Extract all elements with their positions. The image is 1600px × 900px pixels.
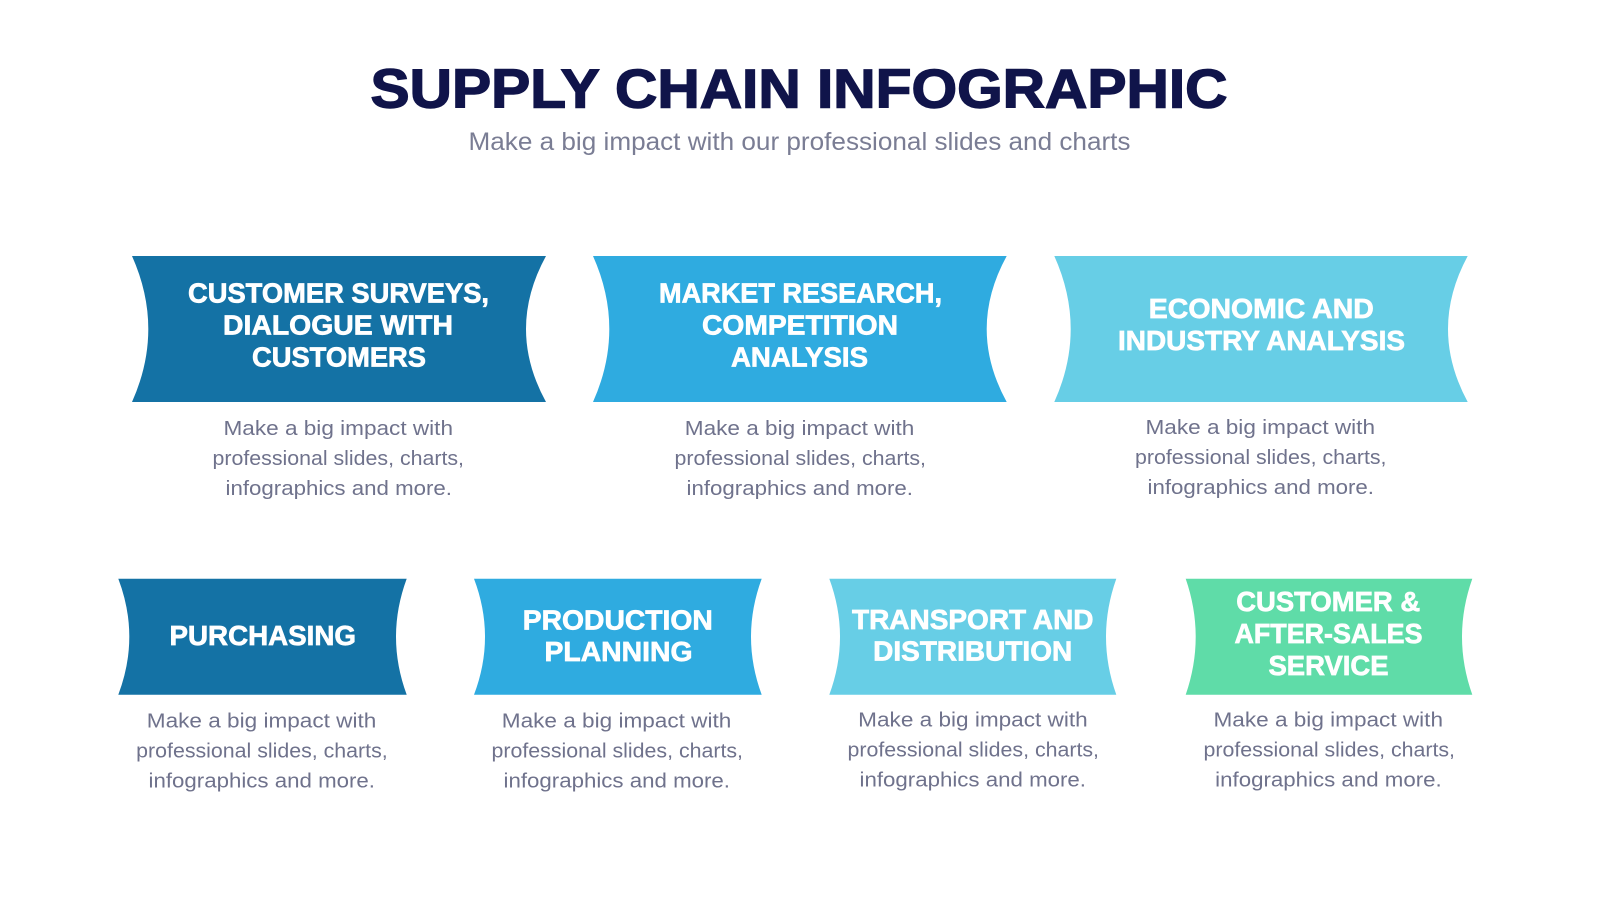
- description: market research: infographics and more.: [686, 478, 913, 500]
- description: production planning: Make a big impact with: [502, 711, 731, 733]
- banner: after-sales service: [1186, 579, 1472, 695]
- panel: market research: [593, 256, 1007, 500]
- panel: customer surveys: [132, 256, 546, 500]
- description: purchasing: [136, 711, 388, 793]
- heading: customer surveys: DIALOGUE WITH: [223, 310, 453, 340]
- banner: production planning: [474, 579, 762, 695]
- description: economic analysis: infographics and more.: [1148, 477, 1374, 499]
- description: market research: [674, 418, 926, 500]
- description: production planning: professional slides, charts,: [492, 741, 743, 763]
- description: customer surveys: [212, 418, 464, 500]
- description: customer surveys: Make a big impact with: [224, 418, 453, 440]
- heading: market research: [659, 278, 942, 372]
- panel: purchasing: [118, 579, 407, 793]
- heading: after-sales service: AFTER-SALES: [1234, 618, 1422, 649]
- banner: economic analysis: [1054, 256, 1468, 402]
- description: transport and distribution: Make a big impact with: [858, 710, 1088, 732]
- description: after-sales service: [1204, 710, 1455, 792]
- description: production planning: [492, 711, 743, 793]
- description: economic analysis: Make a big impact with: [1146, 417, 1375, 439]
- banner: customer surveys: [132, 256, 546, 402]
- panel: transport and distribution: [829, 579, 1116, 792]
- panel: economic analysis: [1054, 256, 1468, 499]
- description: economic analysis: [1135, 417, 1386, 499]
- description: after-sales service: professional slides, charts,: [1204, 740, 1455, 762]
- description: purchasing: Make a big impact with: [147, 711, 376, 733]
- description: purchasing: infographics and more.: [148, 771, 375, 793]
- heading: market research: ANALYSIS: [731, 342, 868, 372]
- banner: transport and distribution: [829, 579, 1116, 695]
- description: after-sales service: Make a big impact with: [1214, 710, 1443, 732]
- heading: market research: MARKET RESEARCH,: [659, 278, 942, 308]
- panel: production planning: [474, 579, 762, 793]
- description: market research: professional slides, charts,: [674, 448, 926, 470]
- description: customer surveys: professional slides, charts,: [212, 448, 464, 470]
- heading: economic analysis: [1118, 293, 1405, 356]
- title: SUPPLY CHAIN INFOGRAPHIC: [370, 58, 1228, 120]
- heading: transport and distribution: DISTRIBUTION: [873, 636, 1072, 666]
- heading: customer surveys: CUSTOMERS: [252, 342, 426, 372]
- description: economic analysis: professional slides, charts,: [1135, 447, 1386, 469]
- description: customer surveys: infographics and more.: [226, 478, 452, 500]
- description: production planning: infographics and more.: [504, 771, 730, 793]
- description: after-sales service: infographics and more.: [1215, 770, 1442, 792]
- heading: transport and distribution: TRANSPORT AND: [852, 604, 1094, 635]
- heading: production planning: PLANNING: [544, 636, 692, 667]
- heading: economic analysis: ECONOMIC AND: [1149, 293, 1374, 324]
- description: transport and distribution: professional slides, charts,: [848, 740, 1099, 762]
- heading: customer surveys: [188, 278, 489, 372]
- subtitle: Make a big impact with our professional slides and charts: [468, 128, 1130, 156]
- banner: purchasing: [118, 579, 407, 695]
- heading: customer surveys: CUSTOMER SURVEYS,: [188, 278, 489, 308]
- heading: after-sales service: CUSTOMER &: [1236, 586, 1420, 617]
- description: market research: Make a big impact with: [685, 418, 914, 440]
- heading: market research: COMPETITION: [702, 310, 898, 340]
- panel: after-sales service: [1186, 579, 1472, 792]
- heading: purchasing: PURCHASING: [170, 620, 356, 651]
- banner: market research: [593, 256, 1007, 402]
- description: purchasing: professional slides, charts,: [136, 741, 388, 763]
- description: transport and distribution: infographics and more.: [860, 770, 1086, 792]
- heading: after-sales service: [1234, 586, 1422, 681]
- heading: after-sales service: SERVICE: [1268, 650, 1388, 681]
- heading: transport and distribution: [852, 604, 1094, 666]
- heading: economic analysis: INDUSTRY ANALYSIS: [1118, 325, 1405, 356]
- heading: production planning: [523, 605, 713, 667]
- description: transport and distribution: [848, 710, 1099, 792]
- heading: production planning: PRODUCTION: [523, 605, 713, 636]
